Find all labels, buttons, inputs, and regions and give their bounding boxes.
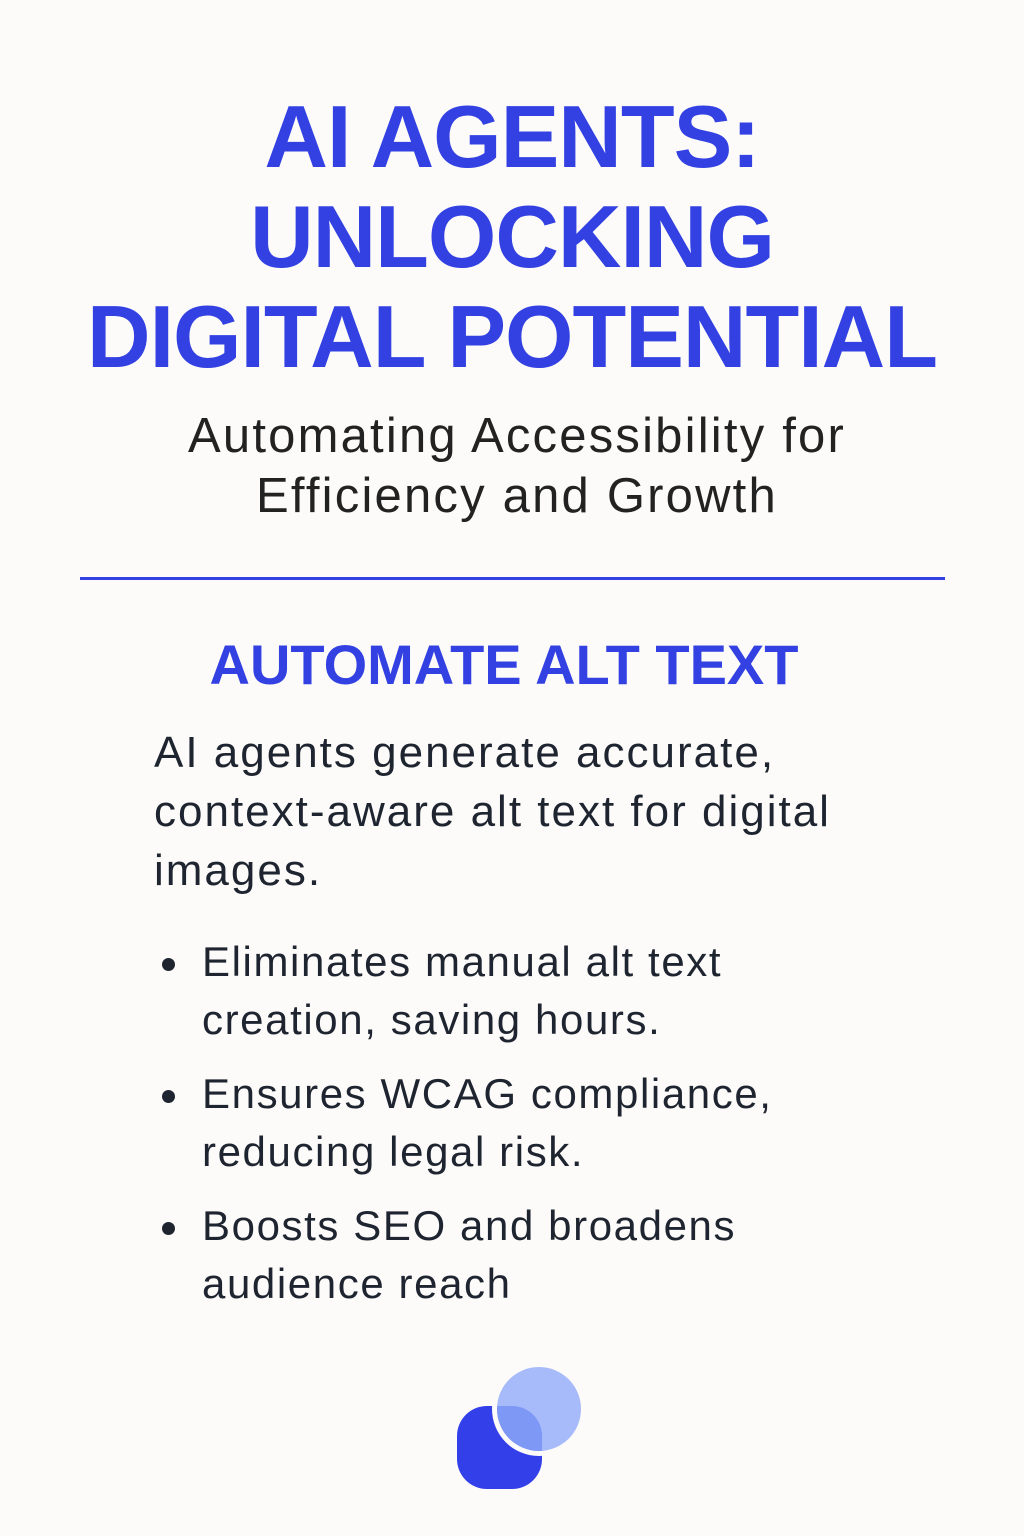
bullet 1 (162, 938, 722, 1043)
title: UNLOCKING (250, 187, 774, 286)
bullet list: reducing legal risk. (202, 1128, 584, 1175)
body text: AI agents generate accurate, (154, 728, 775, 777)
bullet list (162, 938, 773, 1307)
body text (154, 728, 831, 895)
bullet list: Eliminates manual alt text (202, 938, 722, 985)
title: DIGITAL POTENTIAL (87, 287, 937, 386)
title (87, 87, 937, 386)
body text: images. (154, 846, 322, 895)
bullet list: Ensures WCAG compliance, (202, 1070, 773, 1117)
bullet list: creation, saving hours. (202, 996, 661, 1043)
subtitle: Efficiency and Growth (256, 469, 778, 523)
title: AI AGENTS: (264, 87, 760, 186)
bullet list: Boosts SEO and broadens (202, 1202, 736, 1249)
bullet list: audience reach (202, 1260, 512, 1307)
icon: logo (457, 1367, 581, 1489)
subtitle (188, 409, 846, 523)
subtitle: Automating Accessibility for (188, 409, 846, 463)
heading: AUTOMATE ALT TEXT (210, 633, 798, 696)
body text: context-aware alt text for digital (154, 787, 831, 836)
bullet 2 (162, 1070, 773, 1175)
bullet 3 (162, 1202, 736, 1307)
